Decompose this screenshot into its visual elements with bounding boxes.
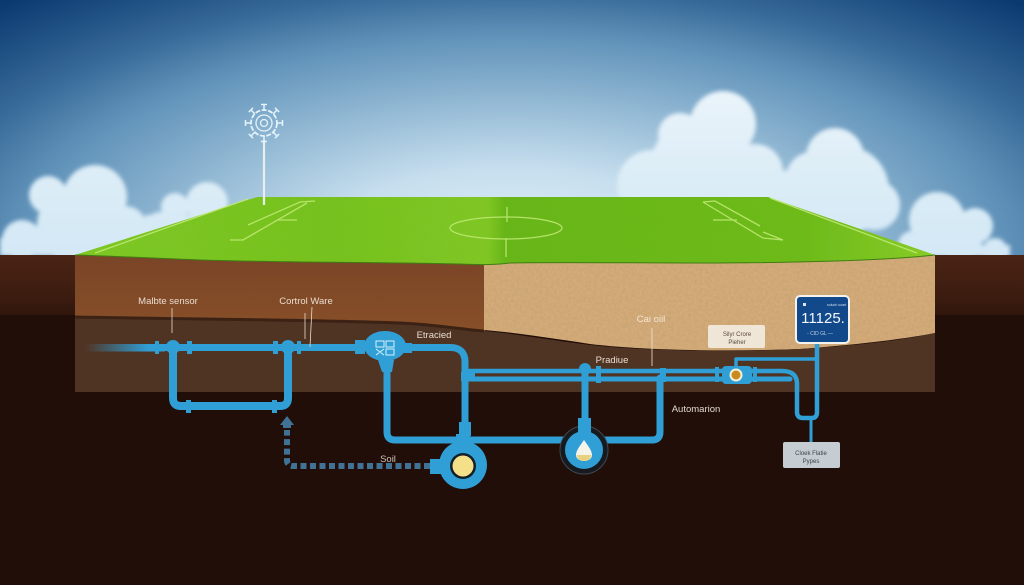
inlet pipe fade bbox=[85, 344, 165, 352]
callout box: Cloek Flatie Pypes: Cloek Flatie bbox=[795, 451, 827, 457]
green field bbox=[75, 197, 935, 265]
clouds bbox=[0, 91, 1010, 263]
water pipe network bbox=[160, 345, 817, 444]
label: Cai oiil: Cai oiil bbox=[637, 314, 665, 325]
callout box: Silyr Crore Pieher: Pieher bbox=[728, 340, 746, 346]
grey box feed bbox=[810, 418, 812, 444]
lower loop bbox=[173, 350, 288, 406]
label: Pradiue: Pradiue bbox=[596, 355, 628, 366]
callout box: Silyr Crore Pieher: Silyr Crore bbox=[723, 332, 752, 338]
deep dark soil bbox=[0, 315, 1024, 585]
pump bbox=[430, 434, 487, 489]
control monitor: ◦ CID GL — bbox=[807, 331, 833, 337]
label: Malbte sensor bbox=[138, 296, 198, 333]
tank with water drop bbox=[560, 418, 608, 474]
side soil left bbox=[0, 255, 76, 325]
main pipe run bbox=[160, 348, 465, 440]
double line upper bbox=[465, 345, 817, 418]
label: Control Ware bbox=[279, 296, 333, 347]
side soil right bbox=[935, 255, 1024, 325]
field markings bbox=[95, 198, 917, 257]
callout box: Silyr Crore Pieher bbox=[708, 325, 765, 348]
dark edge of band bbox=[75, 317, 484, 331]
tank feed bbox=[582, 372, 588, 432]
callout box: Cloek Flatie Pypes: Pypes bbox=[803, 459, 819, 465]
sand soil block bbox=[484, 255, 935, 350]
label: Soil: Soil bbox=[380, 454, 396, 465]
control monitor: 11125. bbox=[801, 310, 845, 327]
dashed return line with arrow bbox=[280, 416, 430, 466]
pipe fittings bbox=[155, 340, 719, 436]
label: Cai oiil bbox=[637, 314, 665, 366]
valve feed line bbox=[736, 359, 817, 368]
double line lower bbox=[465, 376, 790, 382]
control valve blob bbox=[355, 331, 412, 372]
mid soil band bbox=[75, 317, 935, 392]
label: Automarion: Automarion bbox=[672, 404, 720, 415]
label: Control Ware: Cortrol Ware bbox=[279, 296, 333, 307]
control monitor bbox=[796, 296, 849, 343]
callout box: Cloek Flatie Pypes bbox=[783, 442, 840, 468]
control monitor: soluoh uoart bbox=[827, 303, 846, 307]
branch under valve to tank line bbox=[387, 360, 660, 440]
icon: sensor mast wheel bbox=[246, 104, 282, 205]
label: Malbte sensor: Malbte sensor bbox=[138, 296, 198, 307]
inline valve with gauge bbox=[722, 366, 757, 384]
topsoil brown block bbox=[75, 255, 485, 345]
label: Etracied: Etracied bbox=[417, 330, 451, 341]
sky background bbox=[0, 0, 1024, 262]
